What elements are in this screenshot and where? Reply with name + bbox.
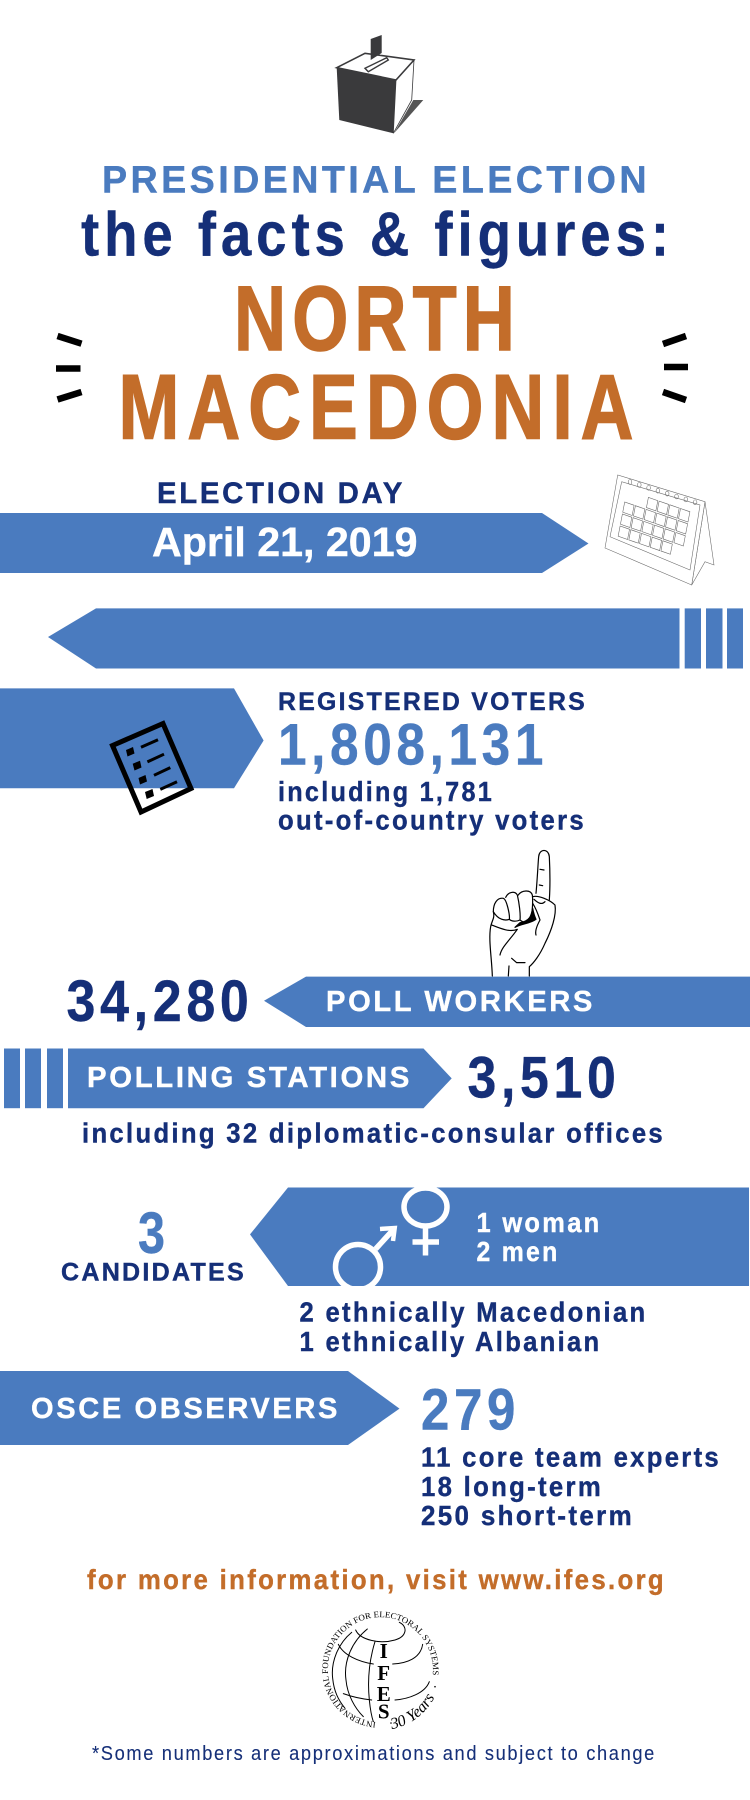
stat: candidates: 3 bbox=[138, 1201, 165, 1266]
arrow banner: polling stations: POLLING STATIONS bbox=[87, 1062, 412, 1094]
text block: registered voters bbox=[278, 688, 587, 836]
text: diplomatic offices note: including 32 diplomatic-consular offices bbox=[82, 1117, 665, 1148]
icon: right emphasis ticks bbox=[663, 336, 688, 400]
text: candidate ethnicity: 2 ethnically Macedonian bbox=[300, 1297, 648, 1328]
stat: polling stations count: 3,510 bbox=[468, 1046, 620, 1110]
text block: observers breakdown: 18 long-term bbox=[421, 1471, 603, 1502]
icon: male symbol bbox=[336, 1228, 395, 1290]
icon: female symbol bbox=[404, 1188, 447, 1256]
heading: country name bbox=[118, 268, 642, 458]
stat: candidates: CANDIDATES bbox=[61, 1258, 246, 1286]
arrow banner: osce observers: OSCE OBSERVERS bbox=[31, 1393, 340, 1425]
icon: checklist bbox=[112, 724, 191, 812]
arrow banner: candidates gender bbox=[250, 1188, 749, 1290]
logo: IFES globe: I bbox=[380, 1639, 388, 1663]
icon: raised index finger hand bbox=[490, 850, 555, 976]
text block: observers breakdown bbox=[421, 1378, 721, 1531]
heading: country name: NORTH bbox=[234, 268, 521, 370]
text block: registered voters: including 1,781 bbox=[278, 776, 494, 807]
arrow banner: poll workers: POLL WORKERS bbox=[326, 986, 595, 1018]
logo: IFES globe: S bbox=[378, 1700, 390, 1724]
arrow banner: poll workers bbox=[264, 977, 750, 1027]
heading: presidential election: PRESIDENTIAL ELECTION bbox=[102, 160, 650, 202]
text block: registered voters: 1,808,131 bbox=[278, 713, 548, 778]
text block: observers breakdown: 11 core team experts bbox=[421, 1442, 721, 1473]
arrow banner: candidates gender: 1 woman bbox=[476, 1207, 602, 1238]
icon: desk calendar bbox=[605, 475, 714, 585]
label: election day: ELECTION DAY bbox=[157, 477, 405, 510]
stat: candidates bbox=[61, 1201, 246, 1286]
text block: observers breakdown: 279 bbox=[421, 1378, 520, 1443]
icon: ballot box bbox=[337, 35, 423, 133]
logo: IFES globe: E bbox=[377, 1682, 391, 1706]
icon: left emphasis ticks bbox=[56, 336, 82, 400]
logo: IFES globe: 30 Years bbox=[391, 1694, 434, 1729]
stat: poll workers count: 34,280 bbox=[66, 969, 254, 1034]
arrow banner: candidates gender: 2 men bbox=[476, 1236, 560, 1267]
arrow banner: election date bbox=[0, 513, 588, 573]
logo: IFES globe: F bbox=[377, 1661, 390, 1685]
text block: observers breakdown: 250 short-term bbox=[421, 1500, 634, 1531]
arrow banner: election date: April 21, 2019 bbox=[152, 519, 418, 565]
footnote: *Some numbers are approximations and subject to change bbox=[92, 1743, 656, 1765]
arrow banner: osce observers bbox=[0, 1371, 400, 1445]
arrow banner: empty left-pointing with stripes bbox=[48, 608, 743, 668]
text: candidate ethnicity bbox=[300, 1297, 648, 1357]
text block: registered voters: REGISTERED VOTERS bbox=[278, 688, 587, 716]
arrow banner: registered voters bbox=[0, 688, 264, 788]
text: website call to action: for more information, visit www.ifes.org bbox=[87, 1564, 666, 1595]
arrow banner: polling stations bbox=[4, 1048, 452, 1108]
heading: the facts and figures: the facts & figures: bbox=[81, 201, 674, 270]
logo: IFES globe: INTERNATIONAL FOUNDATION FOR ELECTORAL SYSTEMS bbox=[322, 1612, 439, 1728]
text block: registered voters: out-of-country voters bbox=[278, 805, 586, 836]
text: candidate ethnicity: 1 ethnically Albanian bbox=[300, 1326, 602, 1357]
